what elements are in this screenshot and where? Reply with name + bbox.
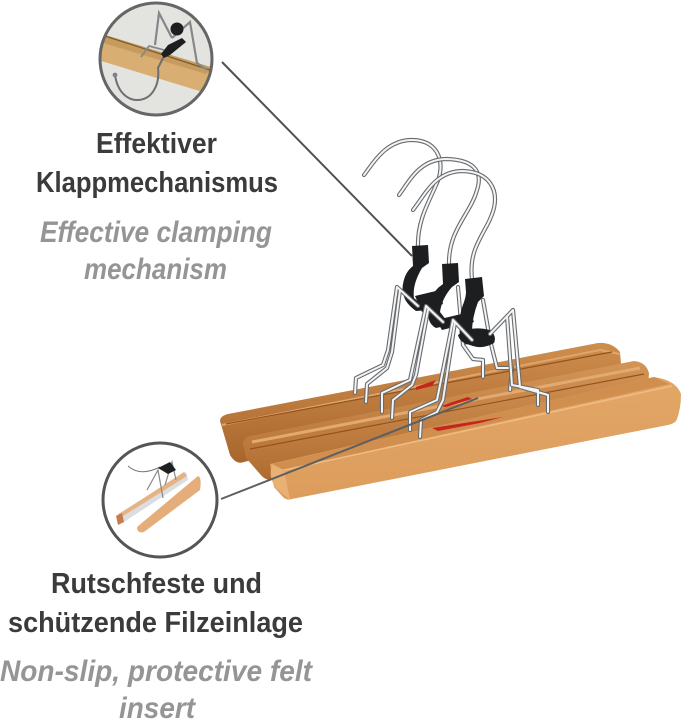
heading: Rutschfeste und schützende Filzeinlage: Rutschfeste und bbox=[51, 568, 262, 600]
red felt inserts bbox=[416, 380, 503, 431]
subheading: Non-slip, protective felt insert bbox=[0, 655, 314, 720]
detail circle: felt insert bbox=[102, 442, 218, 558]
subheading: Effective clamping mechanism: Effective clamping bbox=[40, 216, 272, 249]
subheading: Non-slip, protective felt insert: Non-slip, protective felt bbox=[0, 655, 314, 688]
hanger 3: hook and clamp bbox=[410, 171, 548, 437]
leader line: felt insert bbox=[221, 398, 478, 499]
product photo: three wooden clamp hangers bbox=[220, 140, 681, 500]
subheading: Effective clamping mechanism bbox=[40, 216, 272, 286]
heading: Effektiver Klappmechanismus: Klappmechanismus bbox=[36, 167, 278, 199]
subheading: Effective clamping mechanism: mechanism bbox=[84, 253, 227, 286]
wooden bar: back bbox=[220, 343, 621, 463]
heading: Effektiver Klappmechanismus bbox=[36, 128, 278, 199]
heading: Rutschfeste und schützende Filzeinlage: schützende Filzeinlage bbox=[8, 607, 303, 639]
wooden bar: front bbox=[270, 377, 681, 500]
wooden bar: middle bbox=[243, 361, 649, 480]
heading: Rutschfeste und schützende Filzeinlage bbox=[8, 568, 303, 639]
detail circle: clamping mechanism bbox=[98, 1, 214, 117]
hanger 2: hook and clamp bbox=[382, 159, 512, 418]
hanger 1: hook and clamp bbox=[355, 140, 483, 402]
leader line: clamping mechanism bbox=[222, 62, 412, 256]
heading: Effektiver Klappmechanismus: Effektiver bbox=[96, 128, 217, 160]
